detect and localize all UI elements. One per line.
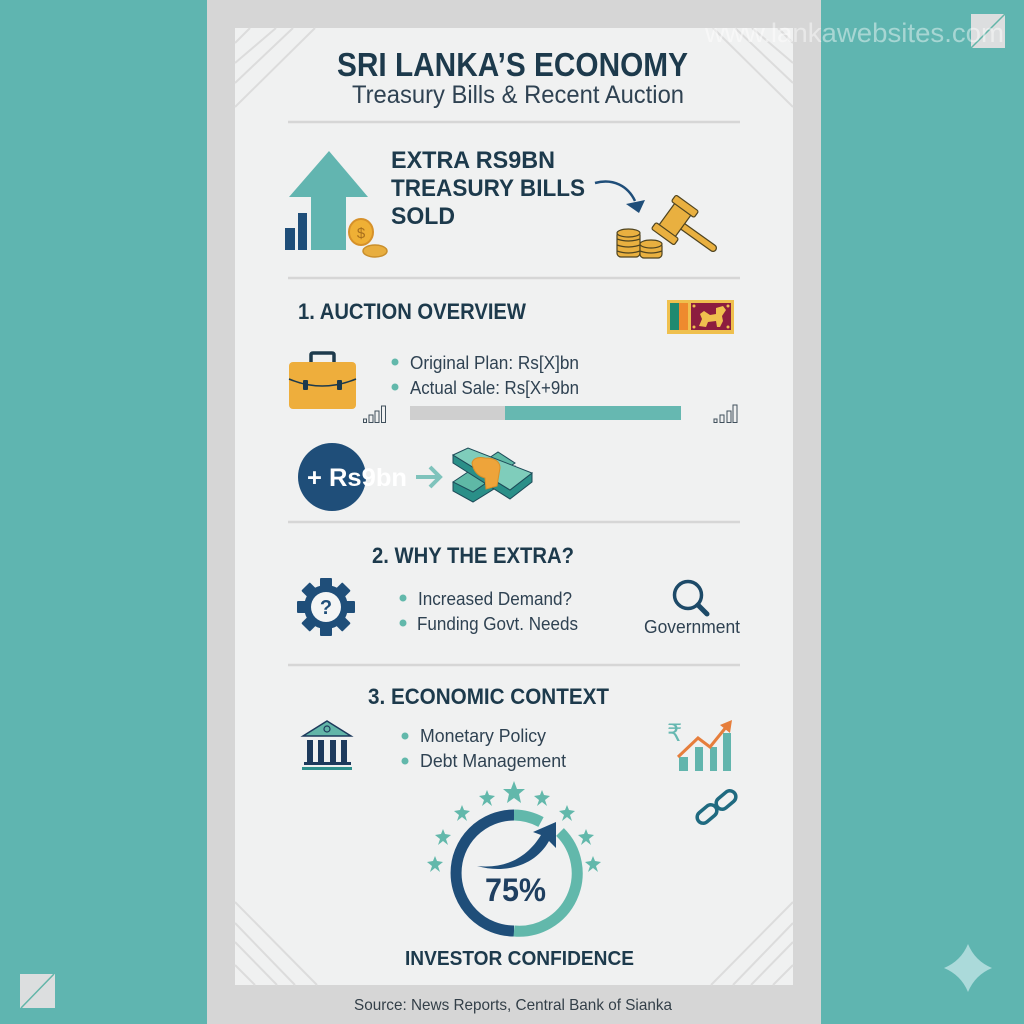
bullet list: reasons: Funding Govt. Needs: [417, 614, 578, 634]
bullet list: auction figures: Original Plan: Rs[X]bn: [410, 353, 579, 373]
icon: left signal bars: [364, 406, 386, 422]
label: investor confidence: INVESTOR CONFIDENCE: [405, 948, 634, 970]
icon: rupee growth chart: ₹: [667, 719, 682, 747]
icon: Sri Lanka flag: [667, 300, 734, 334]
bullet list: reasons: [400, 589, 578, 634]
title: SRI LANKA’S ECONOMY: [337, 46, 688, 83]
icon: coins and gavel: [617, 195, 713, 258]
bullet list: context: Debt Management: [420, 751, 566, 771]
watermark: www.lankawebsites.com: [704, 18, 1004, 48]
headline callout: SOLD: [391, 203, 455, 230]
icon: sparkle: [944, 944, 992, 992]
icon: chain link: [695, 788, 738, 826]
bullet list: auction figures: Actual Sale: Rs[X+9bn: [410, 378, 579, 398]
icon: right signal bars: [714, 405, 737, 422]
chart: investor confidence gauge: [427, 781, 601, 931]
icon: bottom left square: [20, 974, 55, 1008]
bullet list: context: [402, 726, 566, 771]
icon: central bank: [302, 721, 352, 770]
stars around gauge: [427, 781, 601, 872]
heading: economic context: 3. ECONOMIC CONTEXT: [368, 684, 610, 709]
icon: question gear: [297, 578, 355, 636]
headline callout: [391, 147, 585, 230]
icon: rupee growth chart: [667, 719, 732, 771]
callout: plus Rs9bn: + Rs9bn: [307, 464, 407, 492]
heading: auction overview: 1. AUCTION OVERVIEW: [298, 299, 526, 324]
source line: Source: News Reports, Central Bank of Sianka: [354, 997, 672, 1014]
icon: briefcase: [289, 353, 356, 409]
icon: magnifier with Government label: [644, 582, 740, 637]
bullet list: reasons: Increased Demand?: [418, 589, 572, 609]
heading: why the extra: 2. WHY THE EXTRA?: [372, 543, 574, 568]
arrow: to money: [416, 467, 440, 487]
icon: growth arrow with bars and coins: [285, 151, 387, 257]
bar chart: plan versus actual: [410, 406, 681, 420]
icon: magnifier with Government label: Government: [644, 617, 740, 637]
headline callout: EXTRA RS9BN: [391, 147, 555, 174]
icon: growth arrow with bars and coins: $: [357, 225, 366, 242]
subtitle: Treasury Bills & Recent Auction: [352, 81, 684, 109]
arrow: headline to auction: [595, 182, 645, 213]
panel: main sheet: [235, 28, 793, 985]
bullet list: auction figures: [392, 353, 579, 398]
icon: money bundle: [453, 448, 532, 502]
headline callout: TREASURY BILLS: [391, 175, 585, 202]
icon: top right square: [971, 14, 1005, 48]
chart: investor confidence gauge: 75%: [485, 872, 546, 908]
bullet list: context: Monetary Policy: [420, 726, 546, 746]
callout: plus Rs9bn: [298, 443, 407, 511]
icon: question gear: ?: [320, 597, 332, 619]
